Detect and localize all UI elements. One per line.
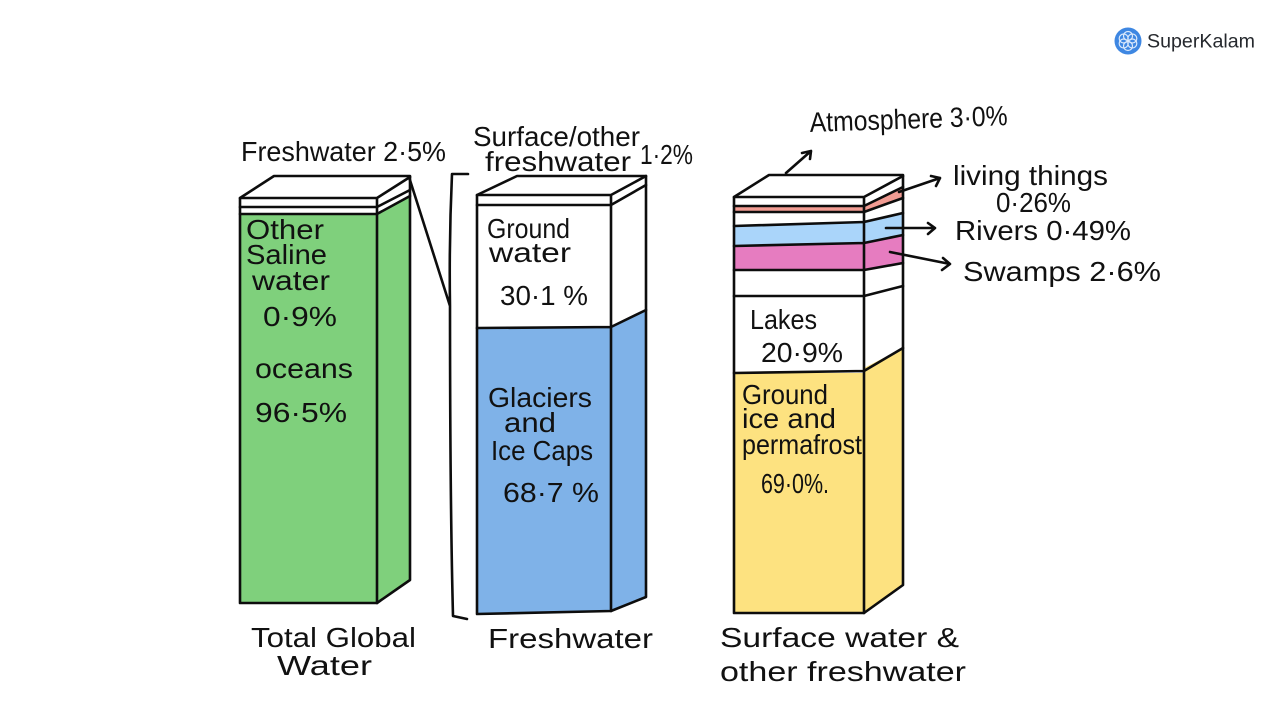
column 2 body <box>477 176 646 614</box>
icon: logo flower <box>1114 28 1142 54</box>
label: ground ice and permafrost: ice and <box>742 403 836 434</box>
label: glaciers and ice caps: Glaciers <box>488 382 592 413</box>
logo wordmark: SuperKalam <box>1147 32 1255 52</box>
label: glaciers and ice caps <box>488 382 599 508</box>
label: surface/other freshwater 1.2%: freshwater <box>485 146 631 177</box>
label: other saline water <box>246 214 337 332</box>
arrow: rivers <box>886 223 935 234</box>
column 3 body <box>734 175 903 613</box>
label: rivers 0.49%: Rivers 0·49% <box>955 215 1131 246</box>
label: glaciers and ice caps: Ice Caps <box>491 435 593 466</box>
arrow: swamps <box>890 252 950 270</box>
arrow: living things <box>899 176 940 192</box>
label: other saline water: Other <box>246 214 324 245</box>
label: surface/other freshwater 1.2%: 1·2% <box>640 139 693 170</box>
label: swamps 2.6%: Swamps 2·6% <box>963 256 1161 287</box>
label: surface/other freshwater 1.2%: Surface/other <box>473 121 640 152</box>
caption: total global water: Water <box>277 650 372 681</box>
label: ground water: Ground <box>487 213 570 244</box>
label: lakes <box>750 304 843 368</box>
caption: freshwater: Freshwater <box>488 623 653 654</box>
label: glaciers and ice caps: 68·7 % <box>503 477 599 508</box>
label: ground ice and permafrost: Ground <box>742 379 828 410</box>
label: surface/other freshwater 1.2% <box>473 121 693 177</box>
label: living things 0.26%: 0·26% <box>996 187 1071 218</box>
arrow: atmosphere <box>786 151 811 173</box>
column 1 green body <box>240 176 410 603</box>
label: ground ice and permafrost: 69·0%. <box>761 468 829 499</box>
label: glaciers and ice caps: and <box>504 407 556 438</box>
label: lakes: 20·9% <box>761 337 843 368</box>
caption: total global water: Total Global <box>251 622 416 653</box>
caption: total global water <box>251 622 416 681</box>
label: atmosphere 3.0%: Atmosphere 3·0% <box>809 100 1008 138</box>
label: living things 0.26% <box>953 160 1108 218</box>
label: lakes: Lakes <box>750 304 817 335</box>
label: other saline water: 0·9% <box>263 301 337 332</box>
label: other saline water: water <box>251 265 330 296</box>
label: freshwater 2.5%: Freshwater 2·5% <box>241 136 446 167</box>
label: oceans: oceans <box>255 353 353 384</box>
caption: surface water and other freshwater <box>720 622 966 687</box>
panel: surface water column <box>734 175 903 613</box>
label: ground water <box>487 213 588 311</box>
label: ground water: 30·1 % <box>500 280 588 311</box>
panel: total global water column <box>240 176 410 603</box>
logo: SuperKalam <box>1114 28 1255 54</box>
panel: freshwater column <box>477 176 646 614</box>
label: ground ice and permafrost: permafrost <box>742 429 862 460</box>
caption: surface water and other freshwater: other freshwater <box>720 656 966 687</box>
label: oceans <box>255 353 353 428</box>
label: ground ice and permafrost <box>742 379 862 499</box>
label: oceans: 96·5% <box>255 397 347 428</box>
bracket connecting column 1 to column 2 <box>409 174 468 619</box>
label: other saline water: Saline <box>246 239 327 270</box>
label: ground water: water <box>488 237 571 268</box>
caption: surface water and other freshwater: Surface water & <box>720 622 959 653</box>
label: living things 0.26%: living things <box>953 160 1108 191</box>
